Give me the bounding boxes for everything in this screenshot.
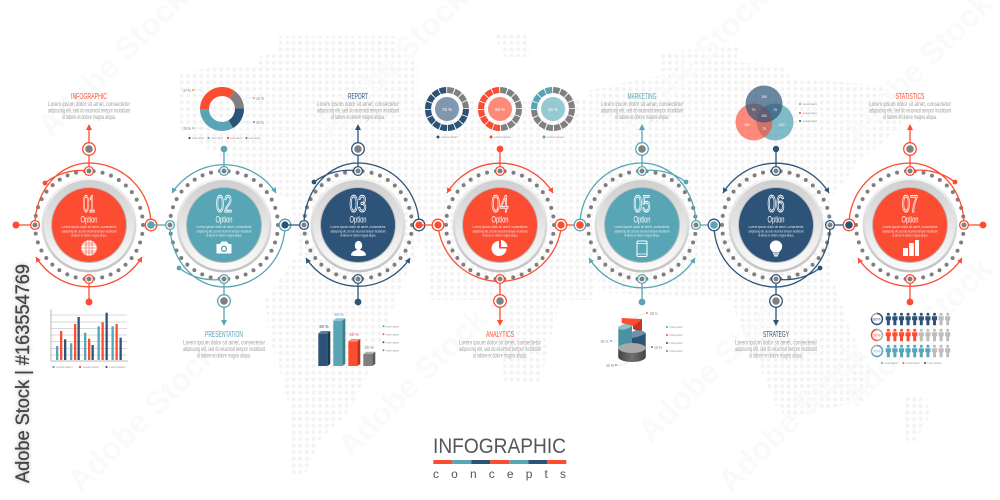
footer title: infographic concepts: INFOGRAPHIC [433,435,566,458]
text block: infographic [48,92,130,121]
chart: 3D cylinder: Lorem ipsum [670,333,683,337]
text block: presentation: Lorem ipsum dolor sit amet, consectetur [183,340,265,346]
disc text [472,225,528,237]
chart: 3D bars: Lorem ipsum [386,348,399,352]
text block: strategy: adipiscing elit, sed do eiusmod tempor incididunt [735,347,817,353]
background: watermark text: Adobe Stock [330,300,494,464]
nodes: step 05 [574,124,700,305]
number 06: 06 [768,191,784,218]
chart: donut: Lorem ipsum [248,136,261,140]
text block: presentation [183,330,265,360]
disc text [748,225,804,237]
ring: step 07 [856,171,964,279]
option label: Option [768,214,784,224]
chart: 3D bars: 80 % [334,312,344,317]
disc text: adipiscing elit, sed do eiusmod tempor incididunt [882,229,938,233]
chart: donut: Lorem ipsum [211,136,223,140]
chart: venn diagram [736,86,817,140]
chart: 3D cylinder: 15 % [654,345,662,350]
connector arcs: step 02 [151,149,285,323]
background: watermark text: Adobe Stock [60,335,224,499]
chart: donut: Lorem ipsum [230,136,242,140]
step 03 [285,124,425,305]
number 04: 04 [492,191,508,218]
number 07: 07 [902,191,918,218]
chart: 50 percent ring: Lorem ipsum [494,135,511,139]
chart: venn diagram: Lorem ipsum [803,111,817,115]
chart: donut: 30 % [183,126,191,131]
chart: 50 percent ring: 50 % [495,107,505,112]
text block: infographic: Lorem ipsum dolor sit amet, consectetur [48,102,130,108]
footer title: infographic concepts [433,435,566,481]
chart: 3D bars: 20 % [364,345,374,350]
disc text [196,225,252,237]
chart: 25 percent ring: 25 % [548,107,558,112]
text block: analytics: ut labore et dolore magna aliqua. [473,354,527,360]
nodes: step 07 [843,124,986,305]
chart: venn diagram: Lorem ipsum [803,119,817,123]
text block: infographic: ut labore et dolore magna aliqua. [62,115,116,121]
disc text: Lorem ipsum dolor sit amet, consectetur [614,225,670,229]
nodes: step 01 [12,124,157,306]
text block: infographic: INFOGRAPHIC [71,92,107,101]
option label: Option [350,214,366,224]
chart: venn diagram: Lorem ipsum [803,102,817,106]
chart: 3D bars: Lorem ipsum [386,332,399,336]
background: watermark text: Adobe Stock [710,335,874,499]
text block: presentation: ut labore et dolore magna aliqua. [197,354,251,360]
chart: grouped bars: Lorem ipsum [56,365,73,369]
connector arcs: step 04 [419,149,580,323]
text block: report: REPORT [348,92,368,101]
text block: analytics [459,330,541,360]
chart: 3D cylinder: Lorem ipsum [670,325,683,329]
chart: people pictogram [872,313,950,365]
chart: 3D cylinder: Lorem ipsum [670,349,683,353]
disc: step 01 [52,188,126,262]
chart: 3D bars [318,312,399,366]
text block: presentation: adipiscing elit, sed do eiusmod tempor incididunt [183,347,265,353]
option label: Option [80,214,98,224]
chart: venn diagram: 75 [752,108,755,112]
disc text [882,225,938,237]
disc text: adipiscing elit, sed do eiusmod tempor incididunt [614,229,670,233]
disc text: ut labore et dolore magna aliqua. [624,233,660,237]
ring: step 02 [170,171,278,279]
text block: analytics: adipiscing elit, sed do eiusmod tempor incididunt [459,347,541,353]
nodes: step 06 [708,146,834,326]
number 02: 02 [216,191,232,218]
icon: light bulb [770,240,782,256]
chart: people pictogram: 80% [873,318,881,322]
disc text: adipiscing elit, sed do eiusmod tempor incididunt [330,229,386,233]
disc text: Lorem ipsum dolor sit amet, consectetur [748,225,804,229]
chart: people pictogram: Lorem ipsum [928,361,942,365]
icon: phone [637,241,647,256]
step 06 [708,146,849,326]
chart: 3D bars: Lorem ipsum [386,340,399,344]
chart: people pictogram: 70% [873,350,881,354]
option label: Option [634,214,650,224]
footer title: infographic concepts: concepts [433,467,566,481]
background: watermark text: Adobe Stock [835,250,999,414]
chart: donut: 37 % [183,88,191,93]
nodes: step 03 [300,124,425,305]
chart: donut: 20 % [256,120,264,125]
text block: strategy: STRATEGY [763,330,789,339]
icon: bar chart [903,240,919,256]
chart: 3D cylinder [600,311,683,368]
text block: presentation: PRESENTATION [205,330,243,339]
text block: statistics: ut labore et dolore magna aliqua. [883,115,937,121]
text block: analytics: ANALYTICS [486,330,514,339]
text block: strategy: ut labore et dolore magna aliqua. [749,354,803,360]
disc text: adipiscing elit, sed do eiusmod tempor incididunt [472,229,528,233]
disc text: Lorem ipsum dolor sit amet, consectetur [330,225,386,229]
disc text: ut labore et dolore magna aliqua. [482,233,518,237]
chart: 3D cylinder: 100 % [650,311,658,316]
side credit text: Adobe Stock | #163554769 [13,264,34,483]
chart: people pictogram: Lorem ipsum [884,361,899,365]
text block: strategy [735,330,817,360]
step 01 [12,124,157,306]
option label: Option [492,214,508,224]
disc: step 05 [605,188,679,262]
step 01: 01 [83,191,95,218]
chart: 3D cylinder: 40 % [606,363,614,368]
icon: camera [216,242,232,254]
connector arcs: step 06 [714,149,849,323]
nodes: step 04 [432,146,567,326]
background: watermark text: Adobe Stock [630,285,794,449]
connector arcs: step 01 [16,127,151,302]
chart: 25 percent ring [534,90,572,139]
color stripe [433,460,566,464]
text block: statistics: Lorem ipsum dolor sit amet, consectetur [869,102,951,108]
disc text: ut labore et dolore magna aliqua. [892,233,928,237]
chart: 75 percent ring: 75 % [442,107,452,112]
chart: 3D bars: 50 % [350,332,358,337]
connector arcs: step 07 [849,127,983,302]
disc text: ut labore et dolore magna aliqua. [340,233,376,237]
chart: venn diagram: 150 [761,95,767,99]
chart: grouped bars: Lorem ipsum [110,365,126,369]
disc text [330,225,386,237]
text block: marketing: MARKETING [628,92,656,101]
chart: donut [183,88,264,140]
step 04 [419,146,580,326]
connector arcs: step 03 [285,127,419,302]
chart: 75 percent ring [428,90,466,139]
text block: report: ut labore et dolore magna aliqua. [331,115,385,121]
chart: venn diagram: 75 [762,127,766,131]
text block: marketing [601,92,683,121]
text block: statistics [869,92,951,121]
disc: step 06 [739,188,813,262]
disc text [62,225,117,237]
text block: marketing: adipiscing elit, sed do eiusmod tempor incididunt [601,108,683,114]
option label: Option [902,214,918,224]
ring: step 01 [35,171,143,279]
text block: analytics: Lorem ipsum dolor sit amet, consectetur [459,340,541,346]
text block: report: adipiscing elit, sed do eiusmod tempor incididunt [317,108,399,114]
text block: report: Lorem ipsum dolor sit amet, consectetur [317,102,399,108]
chart: venn diagram: 150 [744,123,750,127]
chart: donut: Lorem ipsum [192,136,204,140]
disc text: Lorem ipsum dolor sit amet, consectetur [62,225,117,229]
disc text: ut labore et dolore magna aliqua. [206,233,242,237]
disc: step 03 [321,188,395,262]
chart: venn diagram: 150 [779,123,784,127]
disc text: adipiscing elit, sed do eiusmod tempor incididunt [62,229,116,233]
chart: 3D bars: 60 % [320,324,328,329]
chart: grouped bars: Lorem ipsum [83,365,99,369]
text block: report [317,92,399,121]
disc text: ut labore et dolore magna aliqua. [758,233,794,237]
number 03: 03 [350,191,366,218]
icon: pie [492,240,508,256]
step 05 [574,124,714,305]
ring: step 05 [588,171,696,279]
text block: strategy: Lorem ipsum dolor sit amet, consectetur [735,340,817,346]
disc text [614,225,670,237]
text block: marketing: ut labore et dolore magna aliqua. [615,115,669,121]
chart: grouped bars [51,310,128,369]
background: dotted world map [180,35,930,475]
ring: step 04 [446,171,554,279]
chart: 3D cylinder: Lorem ipsum [670,341,683,345]
step 07 [843,124,986,305]
chart: 25 percent ring: Lorem ipsum [547,135,564,139]
icon: user [351,241,366,256]
text block: infographic: adipiscing elit, sed do eiusmod tempor incididunt [48,108,130,114]
nodes: step 02 [166,146,291,326]
chart: venn diagram: 100 [761,114,767,118]
text block: statistics: STATISTICS [896,92,924,101]
disc text: Lorem ipsum dolor sit amet, consectetur [472,225,528,229]
step 02 [151,146,291,326]
option label: Option [216,214,232,224]
disc text: Lorem ipsum dolor sit amet, consectetur [196,225,252,229]
chart: donut: 10 % [256,96,264,101]
disc: step 04 [463,188,537,262]
disc text: adipiscing elit, sed do eiusmod tempor incididunt [748,229,804,233]
disc text: adipiscing elit, sed do eiusmod tempor incididunt [196,229,252,233]
disc text: Lorem ipsum dolor sit amet, consectetur [882,225,938,229]
disc: step 07 [873,188,947,262]
chart: 75 percent ring: Lorem ipsum [441,135,458,139]
number 05: 05 [634,191,650,218]
disc: step 02 [187,188,261,262]
text block: marketing: Lorem ipsum dolor sit amet, consectetur [601,102,683,108]
text block: statistics: adipiscing elit, sed do eiusmod tempor incididunt [869,108,951,114]
chart: people pictogram: 50% [873,334,881,338]
ring: step 03 [304,171,412,279]
icon: globe [81,240,97,256]
connector arcs: step 05 [580,127,714,302]
ring: step 06 [722,171,830,279]
chart: 50 percent ring [481,90,519,139]
chart: people pictogram: Lorem ipsum [906,361,920,365]
chart: 3D bars: Lorem ipsum [386,324,399,328]
chart: venn diagram: 75 [773,108,777,112]
chart: 3D cylinder: 35 % [600,339,608,344]
disc text: ut labore et dolore magna aliqua. [71,233,107,237]
